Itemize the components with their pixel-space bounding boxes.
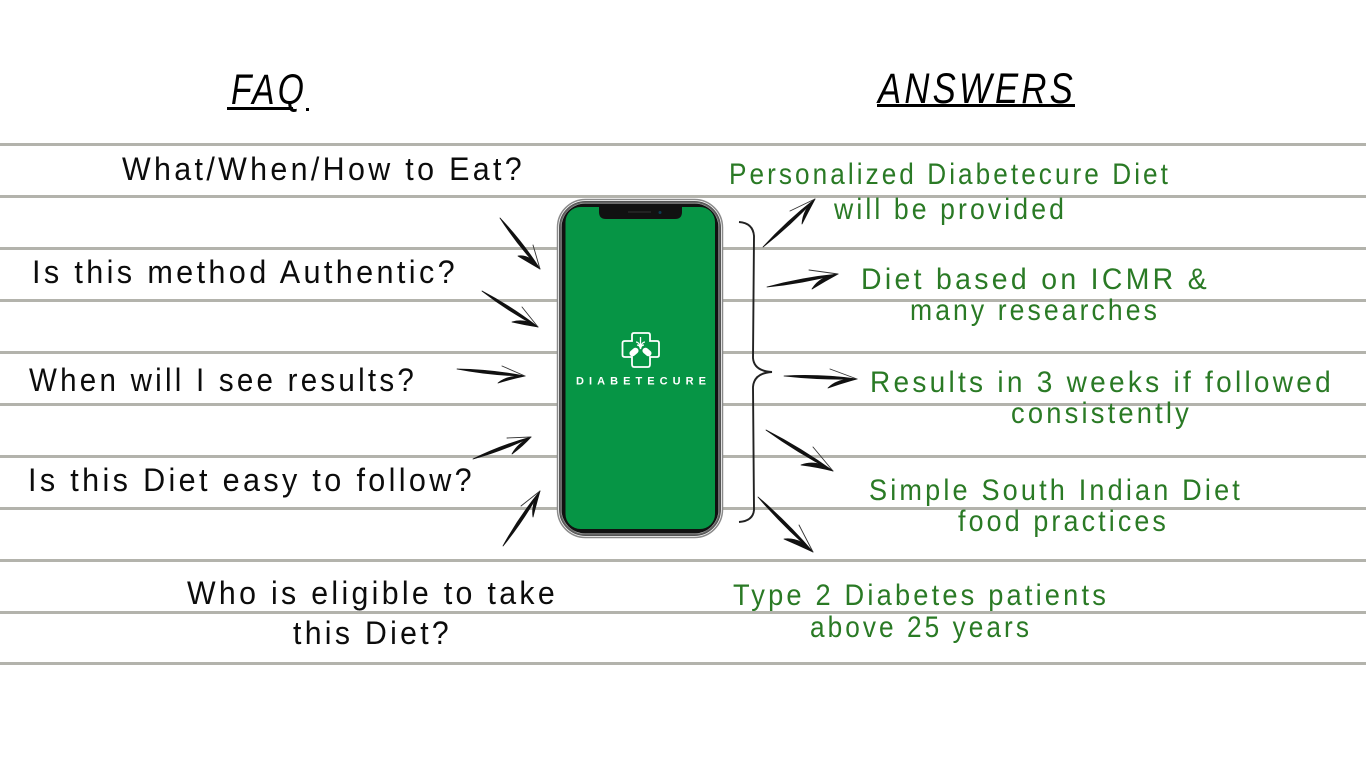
- heading: ANSWERS: ANSWERS: [876, 65, 1076, 113]
- answer: diet based on ICMR: [861, 263, 1210, 327]
- arrow: question 4 to phone: [473, 437, 531, 459]
- question: is this method authentic: Is this method Authentic?: [32, 254, 458, 290]
- answer: simple south indian diet: food practices: [958, 505, 1169, 538]
- answer: type 2 diabetes patients: Type 2 Diabetes patients: [733, 579, 1109, 612]
- answer: diet based on ICMR: many researches: [910, 294, 1160, 327]
- answer: personalized diet: Personalized Diabetecure Diet: [729, 158, 1171, 191]
- arrow: to answer 1: [763, 199, 815, 247]
- answer: simple south indian diet: [869, 474, 1243, 538]
- brace: [739, 222, 772, 522]
- answer: type 2 diabetes patients: above 25 years: [810, 611, 1032, 644]
- question: who is eligible: this Diet?: [293, 615, 452, 651]
- logo wordmark: DIABETECURE: [576, 376, 706, 388]
- question: what when how to eat: What/When/How to Eat?: [122, 151, 525, 187]
- phone screen: [566, 207, 715, 529]
- answer: personalized diet: [729, 158, 1171, 226]
- answer: results in 3 weeks: Results in 3 weeks if followed: [870, 366, 1334, 399]
- heading: FAQ: FAQ: [231, 66, 307, 114]
- answer: results in 3 weeks: [870, 366, 1334, 430]
- arrow: question 1 to phone: [500, 218, 540, 269]
- arrow: to answer 3: [784, 369, 857, 388]
- arrow: question 2 to phone: [482, 291, 538, 327]
- logo: Diabetecure cross: [622, 333, 659, 367]
- question: when will I see results: When will I see results?: [29, 362, 417, 398]
- question: who is eligible: Who is eligible to take: [187, 575, 558, 611]
- answer: results in 3 weeks: consistently: [1011, 397, 1192, 430]
- phone notch: [599, 205, 682, 219]
- arrow: to answer 4: [766, 430, 833, 471]
- arrow: question 5 to phone: [503, 491, 540, 546]
- answer: type 2 diabetes patients: [733, 579, 1109, 644]
- answer: diet based on ICMR: Diet based on ICMR &: [861, 263, 1210, 296]
- phone: [558, 200, 722, 538]
- question: who is eligible: [187, 575, 558, 651]
- arrow: question 3 to phone: [457, 366, 525, 383]
- arrow: to answer 2: [767, 270, 838, 289]
- answer: simple south indian diet: Simple South Indian Diet: [869, 474, 1243, 507]
- answer: personalized diet: will be provided: [833, 193, 1067, 226]
- question: is this diet easy to follow: Is this Diet easy to follow?: [28, 462, 475, 498]
- arrow: to answer 5: [758, 497, 813, 552]
